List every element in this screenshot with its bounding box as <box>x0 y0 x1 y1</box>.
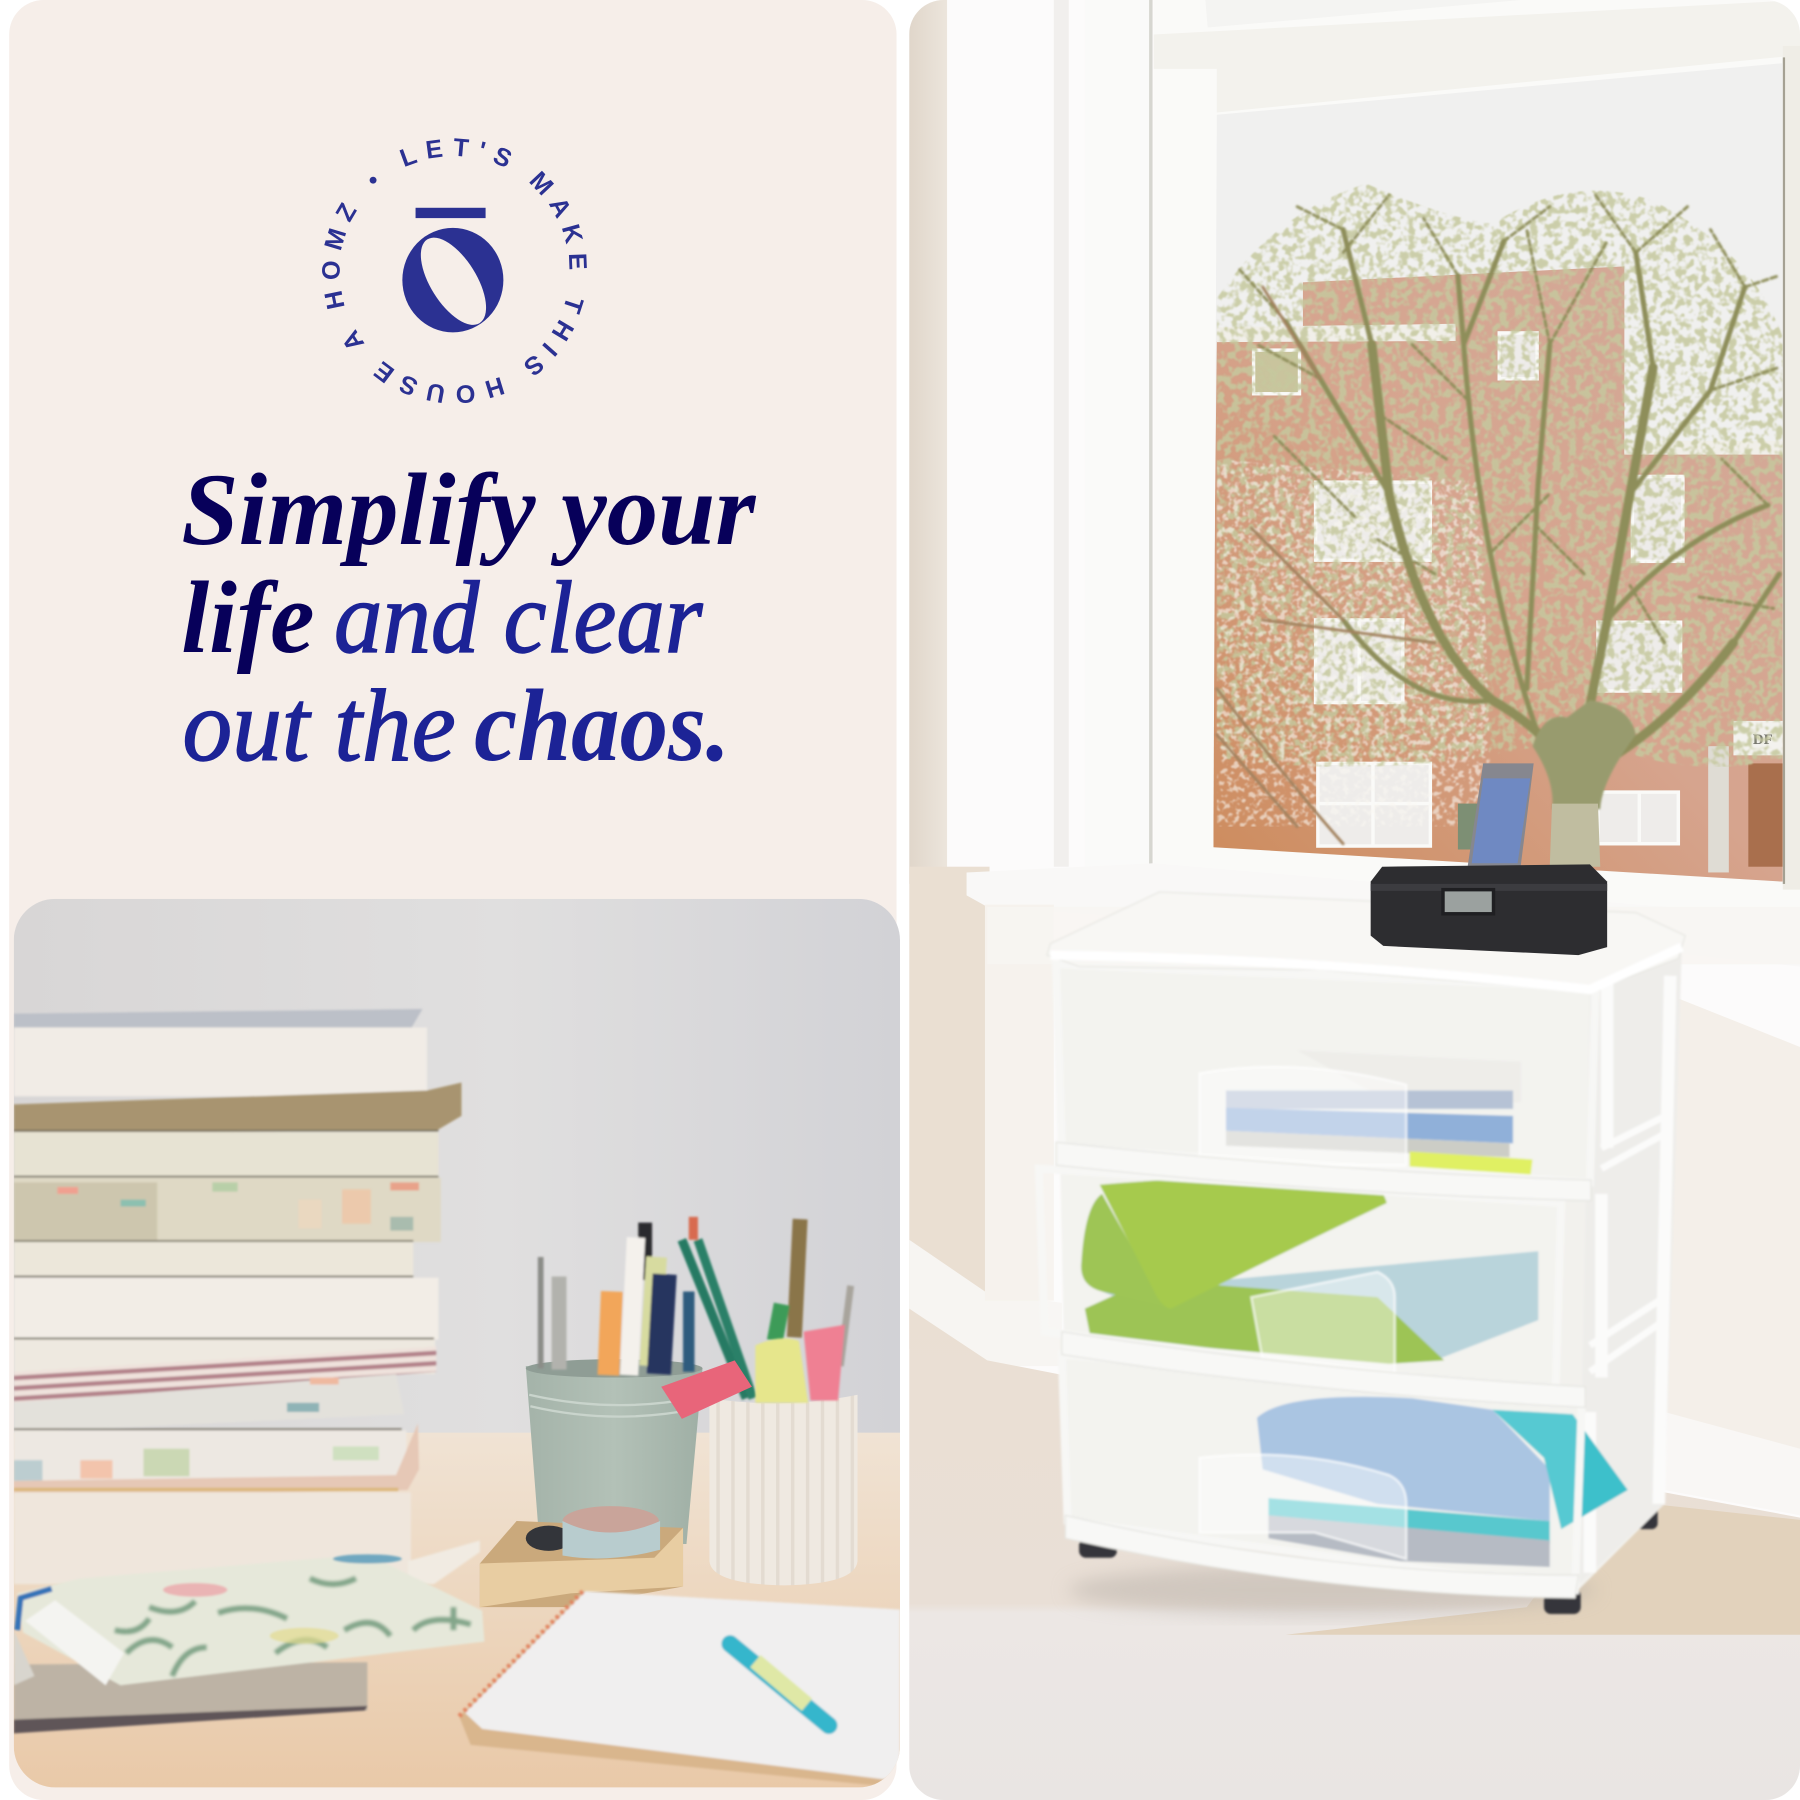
book stack <box>14 1009 480 1584</box>
drawer handles <box>1200 1067 1406 1559</box>
headline: chaos. <box>474 669 730 783</box>
brick building <box>1211 266 1791 884</box>
pink tape <box>661 1360 752 1419</box>
top plate <box>1128 892 1685 970</box>
tree crown foliage <box>1217 184 1785 827</box>
panel: headline card <box>9 0 896 1800</box>
highlighters <box>755 1325 845 1403</box>
pens and pencils <box>541 1217 851 1398</box>
table <box>14 1433 900 1789</box>
macron bar <box>416 208 486 218</box>
drawer fronts <box>1039 964 1596 1590</box>
headline: life <box>181 561 315 675</box>
drawer rims <box>1056 1142 1591 1598</box>
window glass view <box>1205 57 1791 895</box>
radio dock with phone <box>1371 763 1607 955</box>
logo badge <box>322 138 587 403</box>
tree trunk <box>1550 804 1600 867</box>
letter o mark <box>402 227 503 335</box>
headline: and clear <box>334 561 703 675</box>
side panels <box>1578 947 1682 1584</box>
radio display <box>1443 890 1493 914</box>
photo: plastic drawer cart by a window <box>909 0 1800 1800</box>
blurred notebook <box>459 1591 900 1787</box>
wheels <box>1079 1504 1658 1614</box>
shop sign <box>1708 721 1785 872</box>
wooden tray and tapes <box>480 1506 683 1607</box>
middle drawer contents: green towels <box>1081 1177 1538 1364</box>
headline: Simplify your <box>181 453 756 567</box>
bottom drawer contents: blue clothes <box>1257 1397 1628 1567</box>
ribbed cup <box>709 1395 858 1585</box>
radio body <box>1371 864 1607 955</box>
headline <box>181 453 756 783</box>
headline: out the <box>183 669 456 783</box>
cart body <box>1056 947 1682 1590</box>
window frame <box>1154 0 1800 918</box>
building windows <box>1254 333 1683 846</box>
window wall pillars <box>909 0 1153 884</box>
phone <box>1467 763 1534 872</box>
ring dot <box>370 177 377 184</box>
drawer cart <box>1039 892 1685 1614</box>
top drawer contents: books <box>1225 1089 1534 1176</box>
corner wall and floor <box>909 863 1800 1800</box>
photo: desk with books and pens <box>14 899 900 1789</box>
tree branches <box>1217 195 1779 844</box>
circular slogan: LET'S MAKE THIS HOUSE A HOMZ <box>322 138 587 403</box>
pen pot: sage bucket <box>526 1359 703 1544</box>
floral book <box>14 1554 484 1733</box>
shop sign: DF <box>1753 732 1773 748</box>
